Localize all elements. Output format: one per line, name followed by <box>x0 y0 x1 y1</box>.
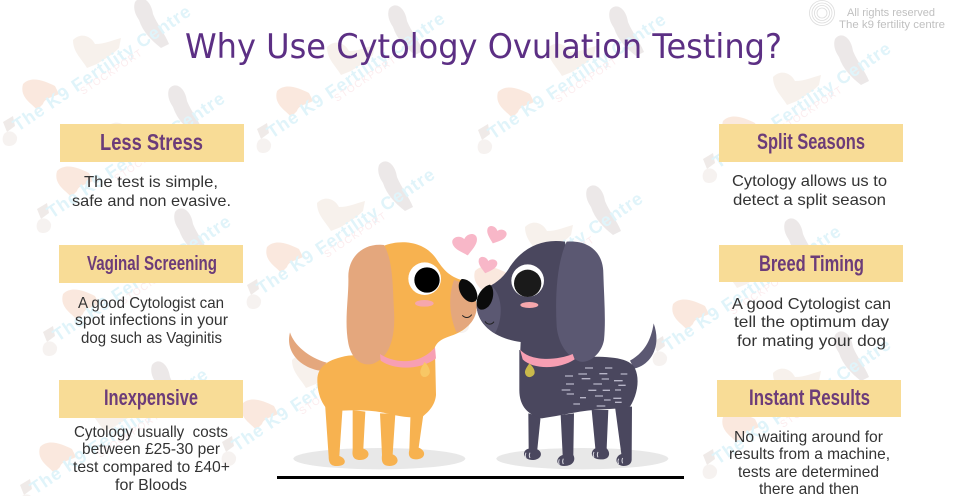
panel: inexpensive: for Bloods <box>115 477 187 494</box>
coat spots <box>562 368 627 406</box>
watermark pattern: STOCKPORT <box>323 211 388 260</box>
ground line <box>277 476 684 479</box>
hearts <box>451 225 508 276</box>
panel: inexpensive: Cytology usually costs <box>74 424 228 441</box>
watermark pattern: The K9 Fertility Centre <box>484 9 669 143</box>
panel: inexpensive <box>59 380 243 494</box>
panel: less stress: Less Stress <box>100 129 203 155</box>
panel: inexpensive: test compared to £40+ <box>73 459 230 476</box>
watermark pattern: STOCKPORT <box>119 258 184 307</box>
watermark pattern: STOCKPORT <box>779 381 844 430</box>
watermark pattern: STOCKPORT <box>113 135 178 184</box>
dark dog <box>477 241 656 466</box>
panel: less stress: The test is simple, <box>84 174 218 191</box>
watermark pattern: The K9 Fertility Centre <box>709 334 894 468</box>
panel: less stress: safe and non evasive. <box>72 193 231 210</box>
panel: breed timing <box>719 245 903 350</box>
copyright notice: The k9 fertility centre <box>839 19 945 31</box>
panel: inexpensive: Inexpensive <box>104 385 198 410</box>
panel: vaginal screening: spot infections in your <box>75 312 229 329</box>
panel: instant results <box>717 380 901 496</box>
panel: instant results: results from a machine, <box>729 446 890 463</box>
watermark pattern: STOCKPORT <box>531 235 596 284</box>
panel: instant results: No waiting around for <box>734 429 884 446</box>
panel: split seasons: detect a split season <box>733 192 886 209</box>
watermark pattern: The K9 Fertility Centre <box>43 88 228 222</box>
panel: split seasons: Cytology allows us to <box>732 173 887 190</box>
panel: less stress <box>60 124 244 210</box>
panel: vaginal screening: dog such as Vaginitis <box>81 330 222 347</box>
copyright notice <box>810 0 945 31</box>
panel: vaginal screening <box>59 245 243 347</box>
panel: vaginal screening: A good Cytologist can <box>78 295 224 312</box>
watermark pattern: The K9 Fertility Centre <box>9 1 194 135</box>
icon: copyright rings <box>810 0 834 26</box>
watermark pattern: STOCKPORT <box>554 56 619 105</box>
panel: breed timing: for mating your dog <box>737 333 886 350</box>
watermark pattern: STOCKPORT <box>96 411 161 460</box>
panel: breed timing: tell the optimum day <box>734 314 889 331</box>
watermark pattern: The K9 Fertility Centre <box>709 38 894 172</box>
illustration: two dogs kissing <box>289 225 668 469</box>
panel: vaginal screening: Vaginal Screening <box>87 253 217 275</box>
panel: breed timing: A good Cytologist can <box>732 296 891 313</box>
watermark pattern: STOCKPORT <box>333 55 398 104</box>
paws <box>525 452 623 465</box>
copyright notice: All rights reserved <box>847 7 935 19</box>
panel: breed timing: Breed Timing <box>759 251 864 276</box>
watermark pattern: STOCKPORT <box>298 368 363 417</box>
watermark pattern: The K9 Fertility Centre <box>659 221 844 355</box>
title: Why Use Cytology Ovulation Testing? <box>185 27 782 66</box>
panel: instant results: tests are determined <box>738 464 879 481</box>
watermark pattern: The K9 Fertility Centre <box>461 188 646 322</box>
watermark pattern: The K9 Fertility Centre <box>253 164 438 298</box>
watermark pattern: The K9 Fertility Centre <box>228 321 413 455</box>
panel: split seasons: Split Seasons <box>757 129 865 154</box>
panel: instant results: Instant Results <box>749 385 870 410</box>
watermark pattern: The K9 Fertility Centre <box>26 364 211 496</box>
ground shadows <box>293 448 668 469</box>
watermark pattern: The K9 Fertility Centre <box>49 211 234 345</box>
watermark pattern: STOCKPORT <box>729 268 794 317</box>
watermark pattern: The K9 Fertility Centre <box>263 8 448 142</box>
watermark pattern: STOCKPORT <box>779 85 844 134</box>
panel: split seasons <box>719 124 903 209</box>
orange dog <box>289 242 477 466</box>
watermark pattern: STOCKPORT <box>79 48 144 97</box>
panel: inexpensive: between £25-30 per <box>82 441 221 458</box>
